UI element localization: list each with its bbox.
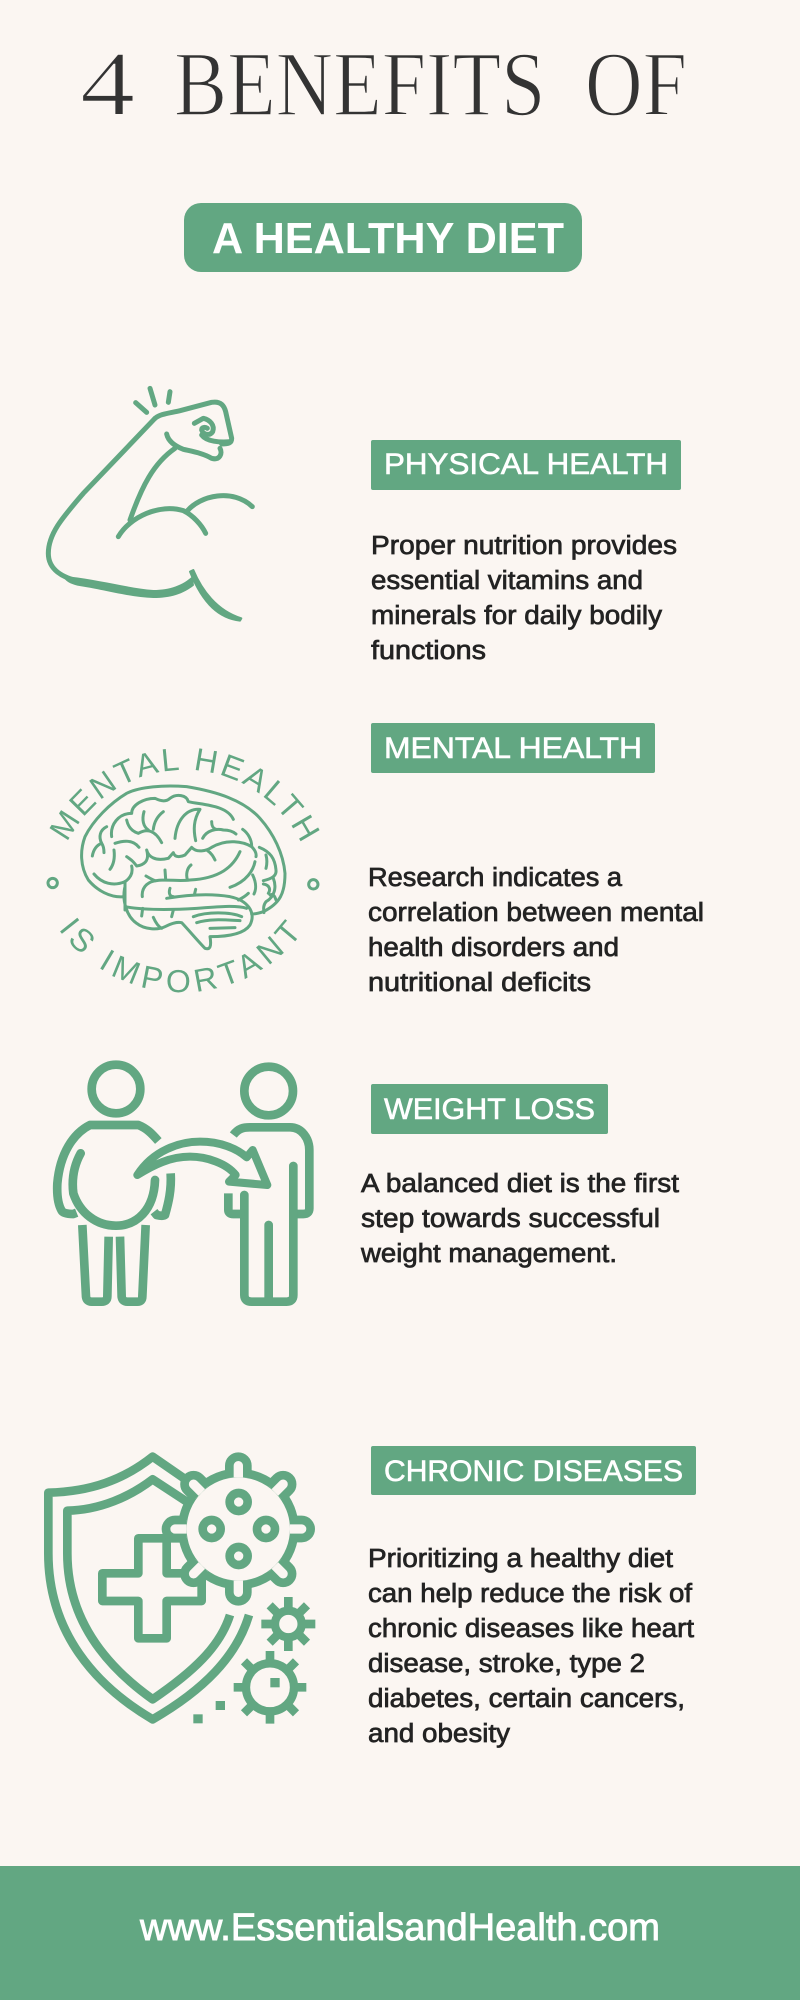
panel: physical health [48, 388, 681, 665]
text: weight loss: weight management. [360, 1240, 617, 1268]
text: physical health: minerals for daily bodily [371, 602, 662, 630]
heading: physical health [371, 440, 681, 490]
panel: weight loss [57, 1065, 679, 1302]
heading: weight loss: WEIGHT LOSS [384, 1093, 595, 1126]
text: chronic diseases: can help reduce the risk of [368, 1580, 693, 1608]
text: mental health: health disorders and [368, 934, 619, 962]
text: chronic diseases: disease, stroke, type 2 [368, 1650, 645, 1678]
title: BENEFITS [174, 33, 545, 135]
text: chronic diseases: and obesity [368, 1720, 510, 1748]
subtitle pill: A HEALTHY DIET [212, 214, 564, 263]
subtitle pill [184, 203, 582, 272]
footer band [0, 1866, 800, 2000]
text: mental health: nutritional deficits [368, 969, 591, 997]
text: physical health: Proper nutrition provides [371, 532, 677, 560]
text: weight loss: step towards successful [361, 1205, 660, 1233]
text: weight loss: A balanced diet is the first [361, 1170, 679, 1198]
icon: brain badge [46, 748, 320, 992]
title: 4 [80, 33, 135, 135]
text: chronic diseases: chronic diseases like heart [368, 1615, 694, 1643]
text: physical health: functions [371, 637, 486, 665]
heading: chronic diseases: CHRONIC DISEASES [384, 1455, 683, 1488]
text: mental health [368, 864, 704, 997]
text: chronic diseases: Prioritizing a healthy diet [368, 1545, 673, 1573]
text: chronic diseases [368, 1545, 694, 1748]
text: mental health: correlation between mental [368, 899, 704, 927]
icon: shield and virus [48, 1457, 315, 1724]
icon: brain badge: MENTAL HEALTH [50, 748, 320, 842]
title [80, 33, 687, 135]
text: chronic diseases: diabetes, certain cancers, [368, 1685, 685, 1713]
heading: physical health: PHYSICAL HEALTH [384, 448, 668, 481]
heading: chronic diseases [371, 1446, 696, 1495]
text: mental health: Research indicates a [368, 864, 623, 892]
text: physical health: essential vitamins and [371, 567, 643, 595]
panel: chronic diseases [48, 1446, 696, 1748]
panel: mental health [46, 723, 704, 997]
icon: flexed arm [48, 388, 252, 621]
footer band: www.EssentialsandHealth.com [139, 1907, 660, 1949]
title: OF [585, 33, 687, 135]
icon: brain badge: IS IMPORTANT [60, 918, 297, 992]
text: weight loss [360, 1170, 679, 1268]
heading: weight loss [371, 1084, 608, 1134]
icon: weight loss figures [57, 1065, 309, 1302]
text: physical health [371, 532, 677, 665]
heading: mental health [371, 723, 655, 773]
heading: mental health: MENTAL HEALTH [384, 732, 642, 765]
